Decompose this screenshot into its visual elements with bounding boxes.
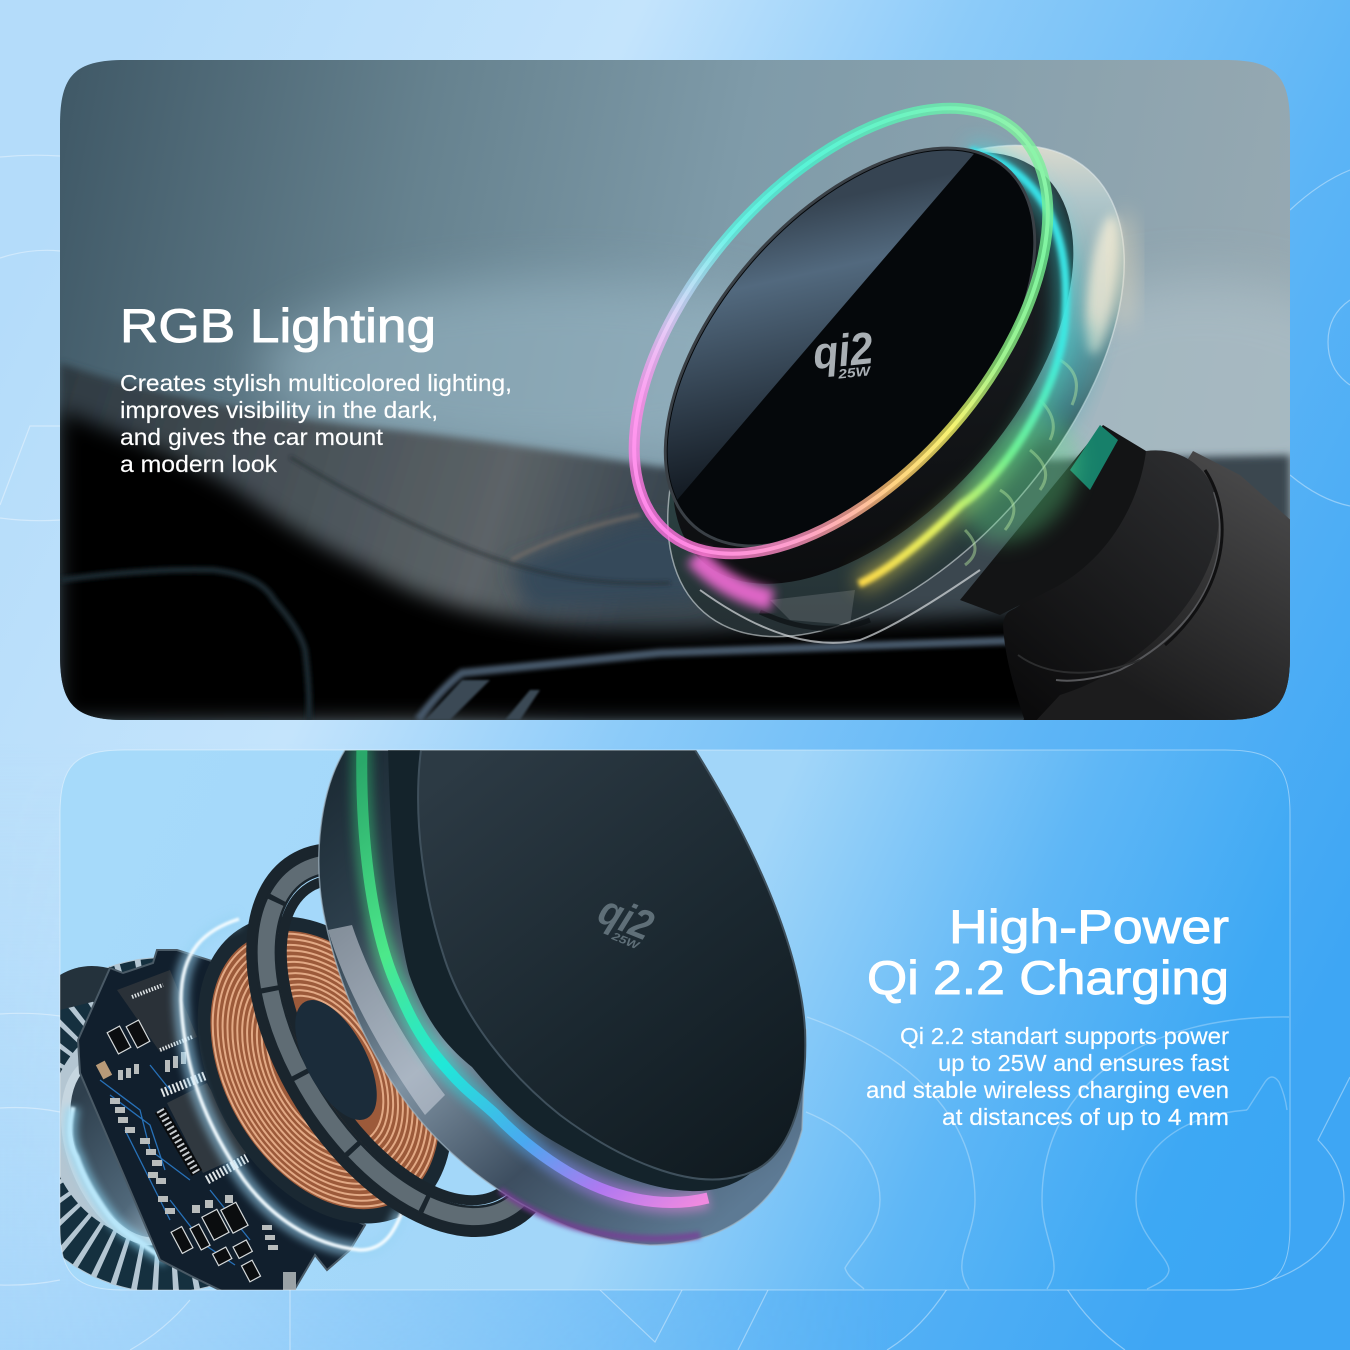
device: charging disc bbox=[664, 146, 1036, 548]
heading: High-Power Qi 2.2 Charging: Qi 2.2 Charging bbox=[867, 951, 1229, 1004]
logo: qi2 25W faint bbox=[598, 903, 654, 948]
text block: charging description: Qi 2.2 standart supports power bbox=[900, 1023, 1229, 1049]
text block: charging description: up to 25W and ensures fast bbox=[938, 1050, 1230, 1076]
glow band on housing bbox=[695, 150, 1066, 600]
floating RGB light ring bbox=[628, 102, 1054, 560]
device: dark housing side bbox=[674, 152, 1074, 584]
text block: RGB description bbox=[120, 370, 512, 477]
device: translucent shell bbox=[667, 144, 1144, 644]
heat sink fan bbox=[60, 958, 210, 1290]
logo: qi2 25W faint: 25W bbox=[609, 930, 642, 953]
panel border highlight bbox=[60, 750, 1290, 1290]
device dark side bbox=[388, 745, 760, 1191]
text block: RGB description: improves visibility in the dark, bbox=[120, 397, 438, 423]
text block: RGB description: a modern look bbox=[120, 451, 278, 477]
logo: qi2 25W: qi2 bbox=[810, 322, 875, 379]
logo: qi2 25W bbox=[814, 332, 872, 379]
heading: RGB Lighting: RGB Lighting bbox=[120, 299, 436, 352]
logo: qi2 25W: 25W bbox=[836, 363, 873, 382]
RGB glow band bbox=[362, 745, 772, 1203]
energy glow arcs bbox=[181, 919, 402, 1250]
device charging face bbox=[418, 750, 805, 1179]
heading: High-Power Qi 2.2 Charging: High-Power bbox=[949, 900, 1229, 953]
car interior backdrop bbox=[60, 60, 1350, 720]
panel: RGB lighting photo bbox=[60, 60, 1350, 725]
text block: charging description bbox=[866, 1023, 1230, 1130]
heading: High-Power Qi 2.2 Charging bbox=[867, 900, 1229, 1004]
text block: RGB description: Creates stylish multicolored lighting, bbox=[120, 370, 512, 396]
copper coil bbox=[210, 930, 438, 1210]
panel outline pattern bbox=[806, 1017, 1289, 1289]
text block: RGB description: and gives the car mount bbox=[120, 424, 384, 450]
logo: qi2 25W faint: qi2 bbox=[592, 886, 660, 949]
back plate bbox=[198, 916, 450, 1224]
electronics circuit board bbox=[78, 950, 365, 1295]
device housing bbox=[319, 750, 806, 1245]
text block: charging description: and stable wireless charging even bbox=[866, 1077, 1229, 1103]
magnet ring bbox=[246, 844, 536, 1237]
text block: charging description: at distances of up to 4 mm bbox=[942, 1104, 1229, 1130]
panel background bbox=[60, 750, 1290, 1290]
car mount arm bbox=[960, 425, 1295, 725]
panel: Qi 2.2 charging bbox=[0, 745, 1290, 1295]
